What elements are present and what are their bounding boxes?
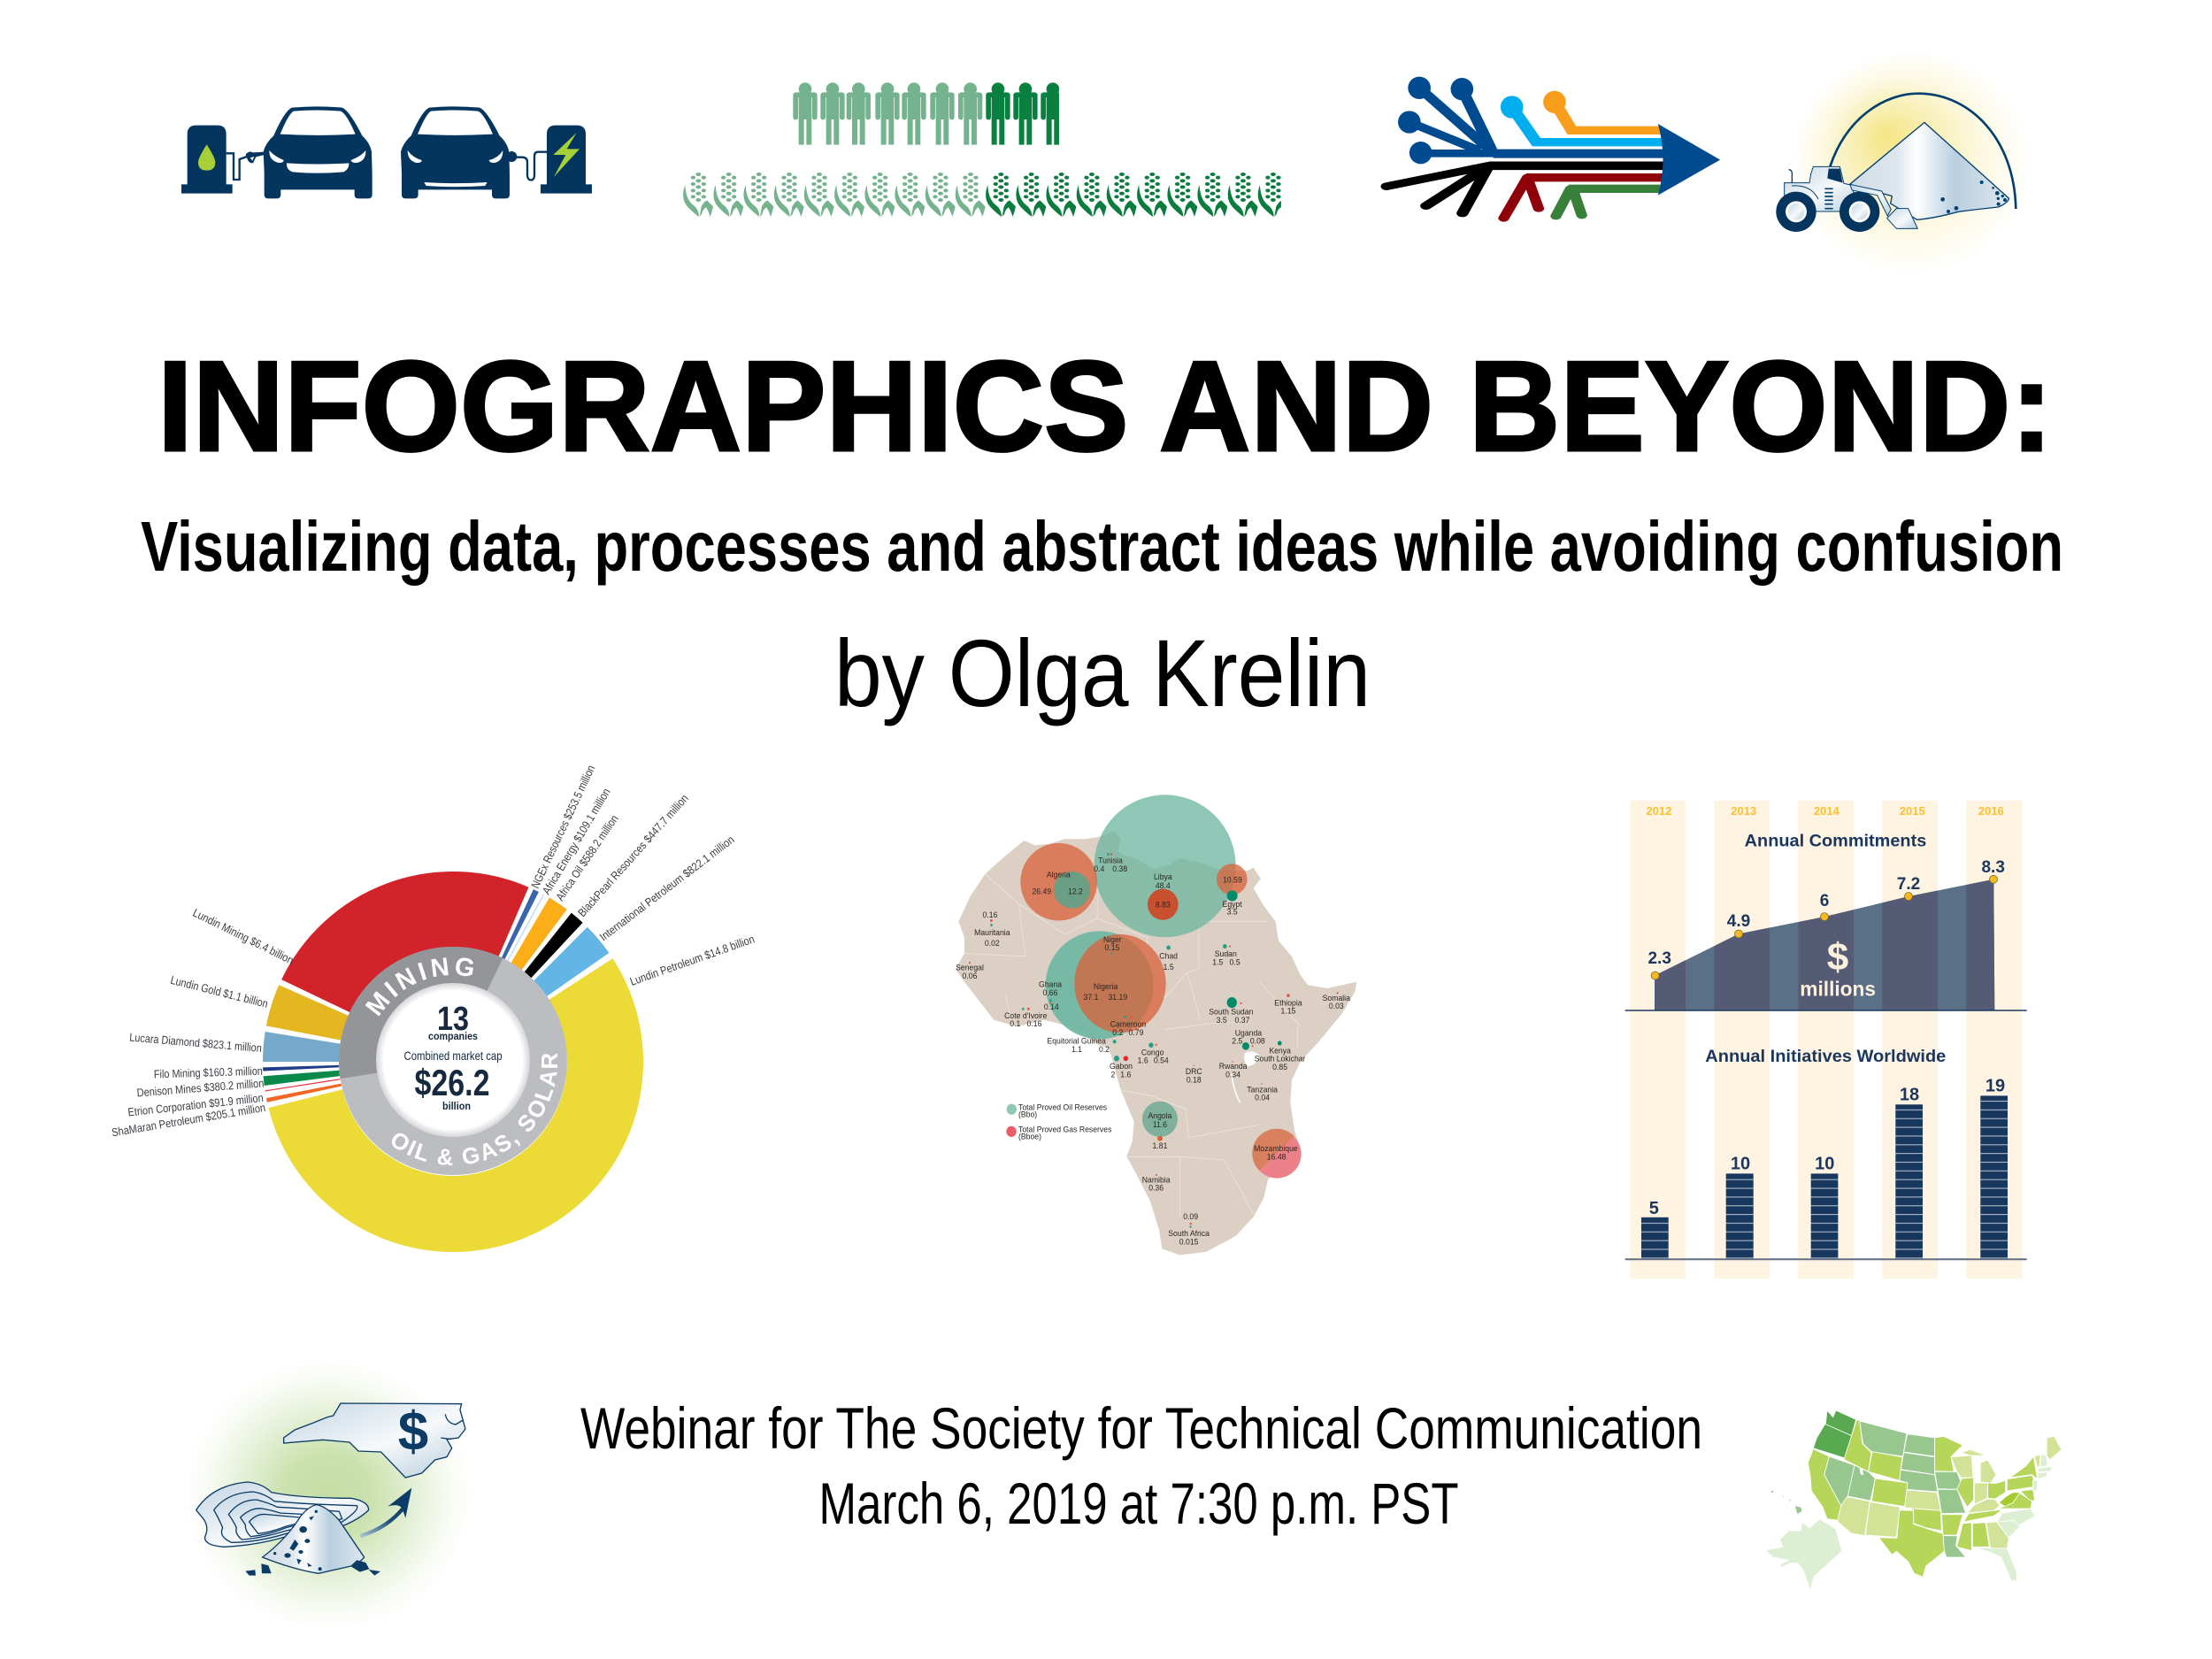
- inner category ring: [339, 947, 567, 1175]
- icon: US choropleth map: [1749, 1410, 2062, 1591]
- bar chart: 19: [1985, 1076, 2005, 1095]
- area chart: 4.9: [1727, 912, 1750, 931]
- company labels: right: BlackPearl Resources $447.7 million: [575, 792, 691, 919]
- chart: Africa reserves map: Nigeria: [1094, 982, 1118, 991]
- country labels: Tunisia: [1098, 856, 1123, 865]
- chart: Africa reserves map: Chad: [1159, 951, 1178, 961]
- year labels: 2012: [1647, 804, 1671, 818]
- chart: Africa reserves map: 0.09: [1183, 1212, 1198, 1221]
- area chart: millions: [1800, 978, 1876, 1001]
- chart: Africa reserves map: 12.2: [1068, 887, 1083, 895]
- chart: Africa reserves map: 0.85: [1272, 1063, 1287, 1071]
- chart: Africa reserves map: 0.79: [1129, 1028, 1143, 1037]
- footer text: March 6, 2019 at 7:30 p.m. PST: [819, 1471, 1458, 1536]
- bar chart: [1625, 1076, 2027, 1259]
- chart: Africa reserves map: 37.1: [1084, 993, 1098, 1002]
- chart: Africa reserves map: Namibia: [1142, 1175, 1171, 1184]
- chart: Africa reserves map: Cameroon: [1110, 1019, 1146, 1028]
- chart: Africa reserves map: [956, 795, 1356, 1255]
- center text: [403, 1001, 503, 1112]
- chart: Africa reserves map: Gabon: [1110, 1062, 1133, 1071]
- chart: Africa reserves map: 2.5: [1232, 1036, 1242, 1045]
- icon: gasoline car: [264, 106, 373, 198]
- heading: annual initiatives: Annual Initiatives Worldwide: [1705, 1048, 1946, 1066]
- chart: Africa reserves map: Mozambique: [1254, 1144, 1298, 1153]
- company labels: right: [528, 763, 757, 988]
- North Carolina outline with dollar: $: [398, 1402, 428, 1463]
- chart: Africa reserves map: 0.08: [1250, 1036, 1265, 1045]
- chart: Africa reserves map: 0.2: [1112, 1028, 1123, 1037]
- center text: $26.2: [414, 1062, 490, 1103]
- area chart: 7.2: [1897, 875, 1920, 894]
- chart: Africa reserves map: 1.5: [1164, 962, 1174, 972]
- chart: Africa reserves map: Cote d'Ivoire: [1004, 1011, 1048, 1020]
- chart: Africa reserves map: 16.48: [1267, 1152, 1286, 1162]
- chart: Africa reserves map: Congo: [1141, 1048, 1164, 1056]
- chart: Africa reserves map: Senegal: [956, 963, 984, 972]
- map legend: [1006, 1102, 1112, 1141]
- bar chart: 18: [1900, 1085, 1919, 1104]
- chart: Africa reserves map: South Lokichar: [1255, 1054, 1306, 1064]
- chart: Africa reserves map: 26.49: [1032, 887, 1051, 895]
- chart: Africa reserves map: Ghana: [1039, 979, 1062, 989]
- chart: donut of market cap: [111, 763, 757, 1252]
- chart: Africa reserves map: 0.38: [1112, 864, 1127, 873]
- title: INFOGRAPHICS AND BEYOND:: [157, 334, 2053, 478]
- chart: Africa reserves map: 3.5: [1217, 1016, 1227, 1025]
- icon: converging lines arrow: [1386, 77, 1720, 219]
- area chart: 6: [1820, 892, 1829, 910]
- map legend: Total Proved Gas Reserves: [1018, 1125, 1112, 1134]
- chart: Africa reserves map: DRC: [1186, 1067, 1202, 1076]
- area chart: $: [1827, 935, 1848, 979]
- chart: Africa reserves map: 1.15: [1281, 1006, 1295, 1015]
- chart: Africa reserves map: Angola: [1148, 1111, 1171, 1120]
- chart: Africa reserves map: South Africa: [1168, 1229, 1210, 1238]
- chart: Africa reserves map: 1.5: [1212, 957, 1223, 967]
- chart: Africa reserves map: 8.83: [1156, 900, 1171, 910]
- area chart: 2.3: [1647, 949, 1671, 968]
- map legend: (Bbo): [1018, 1110, 1037, 1119]
- year labels: 2016: [1978, 804, 2004, 818]
- chart: Africa reserves map: 0.15: [1105, 943, 1119, 952]
- chart: Africa reserves map: 1.81: [1153, 1141, 1167, 1150]
- chart: Africa reserves map: 0.16: [1027, 1019, 1041, 1028]
- chart: Africa reserves map: 1.6: [1138, 1056, 1148, 1064]
- bubbles: [1094, 795, 1236, 937]
- chart: Africa reserves map: 0.37: [1235, 1016, 1249, 1025]
- footer text: [580, 1395, 1702, 1536]
- chart: Africa reserves map: Ethiopia: [1274, 998, 1302, 1007]
- chart: Africa reserves map: Rwanda: [1219, 1062, 1248, 1071]
- icon: front loader and stockpile: [1776, 94, 2016, 232]
- icon: stockpile to North Carolina value: [196, 1402, 465, 1576]
- chart: Africa reserves map: 0.66: [1043, 988, 1057, 997]
- bar chart: 5: [1649, 1199, 1659, 1218]
- chart: Africa reserves map: Sudan: [1215, 949, 1237, 958]
- center text: 13: [437, 1001, 469, 1038]
- company labels: right: Lundin Petroleum $14.8 billion: [628, 933, 757, 988]
- map land: [956, 831, 1356, 1255]
- chart: Africa reserves map: 0.015: [1179, 1237, 1198, 1246]
- chart: Africa reserves map: 0.02: [985, 939, 1000, 948]
- chart: Africa reserves map: Algeria: [1047, 870, 1071, 879]
- rocks: [245, 1510, 380, 1576]
- company labels: left: Lundin Mining $6.4 billion: [191, 906, 296, 967]
- icon: fuel pump: [181, 126, 265, 194]
- icon: electric car: [401, 106, 510, 198]
- chart: Africa reserves map: 0.54: [1154, 1056, 1169, 1064]
- chart: commitments and initiatives: [1625, 801, 2027, 1279]
- company labels: right: NGEx Resources $253.5 million: [528, 763, 597, 890]
- chart: Africa reserves map: 11.6: [1153, 1120, 1167, 1129]
- company labels: right: Africa Oil $588.2 million: [553, 812, 621, 903]
- chart: Africa reserves map: 3.5: [1227, 907, 1238, 917]
- chart: Africa reserves map: Egypt: [1223, 900, 1242, 909]
- chart: Africa reserves map: 0.4: [1094, 864, 1104, 873]
- North Carolina outline with dollar: [284, 1402, 465, 1478]
- chart: Africa reserves map: Uganda: [1235, 1028, 1262, 1038]
- chart: Africa reserves map: 0.03: [1329, 1002, 1344, 1010]
- year labels: 2014: [1814, 804, 1840, 818]
- area chart: [1625, 858, 2027, 1010]
- company labels: left: Denison Mines $380.2 million: [136, 1076, 265, 1099]
- icon: glow behind loader: [1791, 51, 2032, 274]
- chart: Africa reserves map: 0.1: [1010, 1019, 1020, 1028]
- year labels: 2013: [1731, 804, 1756, 818]
- center text: Combined market cap: [403, 1048, 503, 1063]
- chart: Africa reserves map: 31.19: [1108, 993, 1127, 1002]
- icon: crops row: [683, 173, 1288, 217]
- icon: gas and electric cars: [181, 106, 592, 198]
- chart: Africa reserves map: Kenya: [1269, 1046, 1291, 1056]
- small dots: [990, 853, 1282, 1228]
- chart: Africa reserves map: 0.06: [963, 972, 977, 980]
- company labels: left: ShaMaran Petroleum $205.1 million: [111, 1101, 266, 1139]
- heading: annual commitments: Annual Commitments: [1745, 833, 1926, 851]
- chart: Africa reserves map: 48.4: [1156, 881, 1171, 890]
- inner category ring: OIL & GAS, SOLAR: [392, 1053, 557, 1166]
- chart: Africa reserves map: Mauritania: [974, 928, 1010, 937]
- contour map: [196, 1482, 369, 1547]
- chart: Africa reserves map: 10.59: [1223, 875, 1242, 885]
- chart: Africa reserves map: 0.2: [1099, 1045, 1110, 1054]
- year labels: [1647, 804, 2004, 818]
- chart: Africa reserves map: 0.16: [983, 910, 997, 919]
- company labels: right: International Petroleum $822.1 million: [597, 833, 737, 943]
- company labels: left: Lundin Gold $1.1 billion: [169, 973, 270, 1010]
- company labels: left: Etrion Corporation $91.9 million: [127, 1091, 264, 1118]
- chart: Africa reserves map: Niger: [1103, 935, 1122, 944]
- bar chart: 10: [1815, 1155, 1834, 1174]
- company labels: left: Filo Mining $160.3 million: [154, 1064, 263, 1080]
- chart: Africa reserves map: 0.5: [1230, 957, 1240, 967]
- center text: billion: [442, 1100, 471, 1112]
- pile: [263, 1505, 365, 1573]
- chart: Africa reserves map: 1.6: [1120, 1070, 1131, 1079]
- center text: companies: [428, 1030, 478, 1042]
- chart: Africa reserves map: Libya: [1154, 872, 1172, 881]
- area chart: 8.3: [1981, 858, 2005, 877]
- chart: Africa reserves map: 0.18: [1187, 1075, 1202, 1085]
- chart: Africa reserves map: South Sudan: [1209, 1007, 1253, 1017]
- arrow: [360, 1488, 411, 1536]
- year bands: [1630, 801, 2022, 1279]
- map legend: Total Proved Oil Reserves: [1018, 1102, 1108, 1112]
- icon: glow behind NC illustration: [185, 1360, 472, 1631]
- chart: Africa reserves map: 2: [1111, 1070, 1115, 1079]
- year labels: 2015: [1900, 804, 1925, 818]
- chart: Africa reserves map: 0.36: [1148, 1183, 1164, 1192]
- author: by Olga Krelin: [834, 619, 1371, 726]
- chart: Africa reserves map: 0.34: [1225, 1070, 1240, 1079]
- chart: Africa reserves map: 0.04: [1255, 1093, 1270, 1102]
- icon: people row: [793, 82, 1065, 145]
- inner category ring: MINING: [365, 957, 473, 1016]
- outer donut segments: [238, 847, 668, 1277]
- chart: Africa reserves map: Equitorial Guinea: [1047, 1036, 1106, 1045]
- chart: Africa reserves map: 0.14: [1044, 1002, 1059, 1011]
- company labels: left: [111, 906, 296, 1139]
- map legend: (Bboe): [1018, 1132, 1041, 1141]
- chart: Africa reserves map: Somalia: [1323, 994, 1350, 1002]
- icon: charging station: [506, 126, 592, 194]
- company labels: right: Africa Energy $109.1 million: [540, 786, 613, 897]
- chart: Africa reserves map: Tanzania: [1247, 1085, 1278, 1094]
- chart: Africa reserves map: 1.1: [1071, 1045, 1082, 1054]
- footer text: Webinar for The Society for Technical Communication: [580, 1395, 1702, 1461]
- bar chart: 10: [1731, 1155, 1750, 1174]
- company labels: left: Lucara Diamond $823.1 million: [129, 1031, 262, 1055]
